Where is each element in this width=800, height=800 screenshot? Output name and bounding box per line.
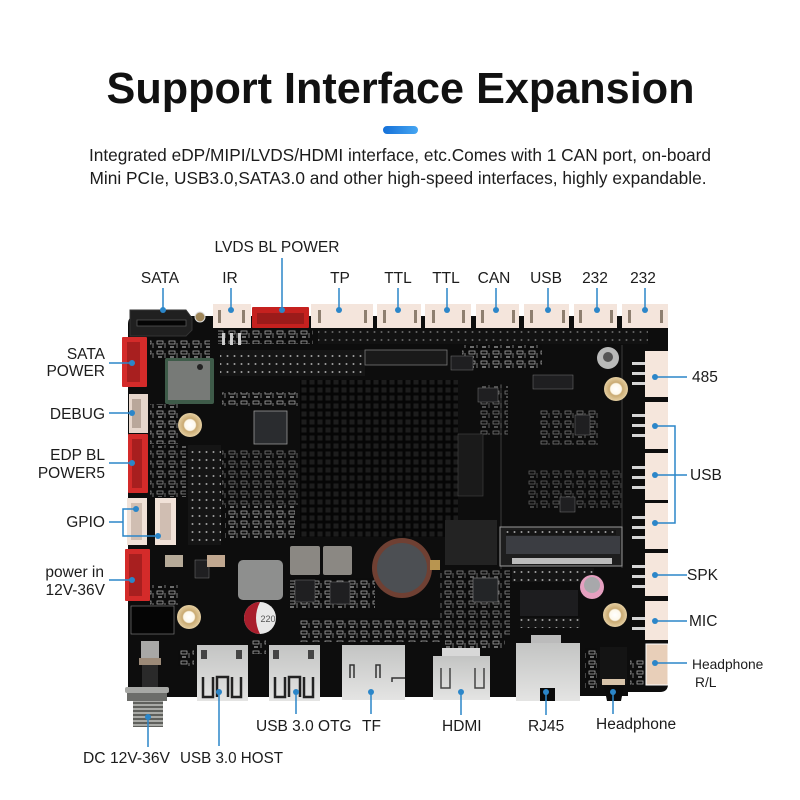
electrolytic capacitor 220 bbox=[244, 602, 276, 634]
label: HDMI: HDMI bbox=[442, 718, 482, 735]
leader: LVDS BL POWER bbox=[279, 258, 285, 313]
label: 232 one: 232 bbox=[582, 270, 608, 287]
board substrate bbox=[128, 316, 668, 697]
left pin header bbox=[188, 445, 221, 545]
label: MIC: MIC bbox=[689, 613, 717, 630]
tactile buttons bbox=[165, 555, 225, 567]
label: RJ45: RJ45 bbox=[528, 718, 564, 735]
label: SATA: SATA bbox=[141, 270, 180, 287]
TTL connector two bbox=[425, 304, 471, 328]
small inductor one bbox=[290, 546, 320, 575]
pink capacitor bbox=[580, 575, 604, 599]
red connector: LVDS backlight bbox=[252, 307, 309, 328]
label: 232 two: 232 bbox=[630, 270, 656, 287]
right connector pins bbox=[632, 362, 645, 630]
label: TTL two: TTL bbox=[432, 270, 460, 287]
left red connector: SATA power bbox=[122, 337, 147, 387]
USB 3.0 OTG port bbox=[269, 645, 320, 701]
IR connector bbox=[213, 304, 251, 328]
label: DC 12V-36V: DC 12V-36V bbox=[83, 750, 171, 767]
right connector: USB two bbox=[645, 453, 668, 500]
leader: CAN bbox=[493, 288, 499, 313]
intro text bbox=[89, 145, 711, 188]
intro text: Integrated eDP/MIPI/LVDS/HDMI interface, etc.Comes with 1 CAN port, on-board bbox=[89, 145, 711, 165]
TF card slot bbox=[342, 645, 405, 700]
label: power in 12V-36V: 12V-36V bbox=[46, 582, 106, 599]
right connector: SPK bbox=[645, 553, 668, 596]
antenna socket bbox=[195, 312, 205, 322]
TP connector bbox=[311, 304, 373, 328]
leader: right USB bracket bbox=[652, 423, 687, 526]
leader: SATA power bbox=[109, 360, 135, 366]
chip left of slot bbox=[445, 520, 497, 565]
left connector: GPIO one bbox=[127, 498, 147, 545]
USB connector bbox=[524, 304, 569, 328]
label: GPIO: GPIO bbox=[66, 514, 105, 531]
right connector: MIC bbox=[645, 601, 668, 640]
leader: MIC bbox=[652, 618, 687, 624]
label: TF: TF bbox=[362, 718, 381, 735]
label: SATA POWER: POWER bbox=[46, 363, 105, 380]
leader: 232 one bbox=[594, 288, 600, 313]
accent bar bbox=[383, 126, 418, 134]
circuit board photo bbox=[122, 304, 668, 727]
leader: 485 bbox=[652, 374, 687, 380]
RJ45 port bbox=[516, 635, 580, 701]
FPC connector bbox=[365, 350, 447, 365]
label: Headphone: Headphone bbox=[596, 716, 676, 733]
label: SPK: SPK bbox=[687, 567, 719, 584]
leader lines bbox=[109, 258, 687, 747]
label: power in 12V-36V: power in bbox=[45, 564, 104, 581]
leader: 232 two bbox=[642, 288, 648, 313]
label: EDP BL POWER5: EDP BL bbox=[50, 447, 105, 464]
mounting hole bottom left bbox=[177, 605, 201, 629]
chip below heatsink bbox=[473, 578, 498, 602]
leader: EDP BL power bbox=[109, 460, 135, 466]
leader: GPIO bracket bbox=[109, 506, 161, 539]
label: TP: TP bbox=[330, 270, 350, 287]
label: 485: 485 bbox=[692, 369, 718, 386]
mounting hole top right bbox=[604, 377, 628, 401]
SATA connector bbox=[130, 310, 192, 336]
mounting hole top left bbox=[178, 413, 202, 437]
mini PCIe slot bbox=[500, 527, 622, 566]
label: USB 3.0 HOST: USB 3.0 HOST bbox=[180, 750, 284, 767]
leader: SATA bbox=[160, 288, 166, 313]
232 connector one bbox=[574, 304, 617, 328]
connector latches and pins bbox=[218, 310, 663, 345]
left red connector: power in bbox=[125, 549, 150, 601]
title: Support Interface Expansion bbox=[107, 65, 694, 113]
label: EDP BL POWER5: POWER5 bbox=[38, 465, 105, 482]
right connector: USB three bbox=[645, 503, 668, 549]
HDMI port bbox=[433, 648, 490, 700]
right connector: USB one bbox=[645, 402, 668, 449]
USB 3.0 host port bbox=[197, 645, 248, 701]
label: TTL one: TTL bbox=[384, 270, 412, 287]
label: Headphone R/L: Headphone bbox=[692, 657, 764, 672]
label: right USB: USB bbox=[690, 467, 722, 484]
headphone jack bbox=[600, 647, 627, 701]
right connector: 485 bbox=[645, 351, 668, 397]
label: Headphone R/L: R/L bbox=[695, 675, 717, 690]
coin cell battery bbox=[372, 538, 440, 598]
232 connector two bbox=[622, 304, 668, 328]
power inductor block bbox=[131, 606, 174, 634]
leader: RJ45 bbox=[543, 689, 549, 715]
chip beside heatsink bbox=[458, 434, 483, 496]
left red connector: EDP backlight bbox=[128, 434, 148, 493]
small inductor two bbox=[323, 546, 352, 575]
leader: TTL one bbox=[395, 288, 401, 313]
leader: TP bbox=[336, 288, 342, 313]
label: top USB: USB bbox=[530, 270, 562, 287]
large IC bbox=[520, 590, 578, 616]
TTL connector one bbox=[377, 304, 421, 328]
leader: headphone bbox=[610, 689, 616, 714]
leader: IR bbox=[228, 288, 234, 313]
screw standoff bbox=[597, 347, 619, 369]
intro text: Mini PCIe, USB3.0,SATA3.0 and other high-speed interfaces, highly expandable. bbox=[89, 168, 707, 188]
label: LVDS BL POWER: LVDS BL POWER bbox=[215, 239, 339, 256]
main chip bbox=[254, 411, 287, 444]
leader: TF bbox=[368, 689, 374, 714]
leader: power in bbox=[109, 577, 135, 583]
label: USB 3.0 OTG: USB 3.0 OTG bbox=[256, 718, 352, 735]
silkscreen component areas bbox=[150, 330, 648, 688]
leader: headphone R/L bbox=[652, 660, 687, 666]
leader: SPK bbox=[652, 572, 687, 578]
right connector: headphone R/L bbox=[646, 644, 668, 685]
leader: debug bbox=[109, 410, 135, 416]
labels bbox=[38, 239, 764, 767]
wifi module bbox=[165, 358, 214, 404]
DC jack bbox=[125, 641, 169, 727]
electrolytic capacitor 220: 220 bbox=[260, 614, 276, 624]
leader: DC bbox=[145, 714, 151, 747]
leader: TTL two bbox=[444, 288, 450, 313]
label: IR: IR bbox=[222, 270, 238, 287]
left connector: GPIO two bbox=[155, 498, 176, 545]
leader: top USB bbox=[545, 288, 551, 313]
leader: USB 3.0 OTG bbox=[293, 689, 299, 714]
mounting hole bottom right bbox=[603, 603, 627, 627]
leader: HDMI bbox=[458, 689, 464, 715]
CAN connector bbox=[476, 304, 519, 328]
heatsink bbox=[300, 380, 458, 537]
SMD chips bbox=[195, 356, 590, 604]
leader: USB 3.0 host bbox=[216, 689, 222, 746]
label: SATA POWER: SATA bbox=[67, 346, 106, 363]
large inductor bbox=[238, 560, 283, 600]
label: CAN: CAN bbox=[478, 270, 510, 287]
label: DEBUG: DEBUG bbox=[50, 406, 105, 423]
pin header block bbox=[220, 350, 365, 376]
left connector: debug bbox=[129, 394, 148, 433]
